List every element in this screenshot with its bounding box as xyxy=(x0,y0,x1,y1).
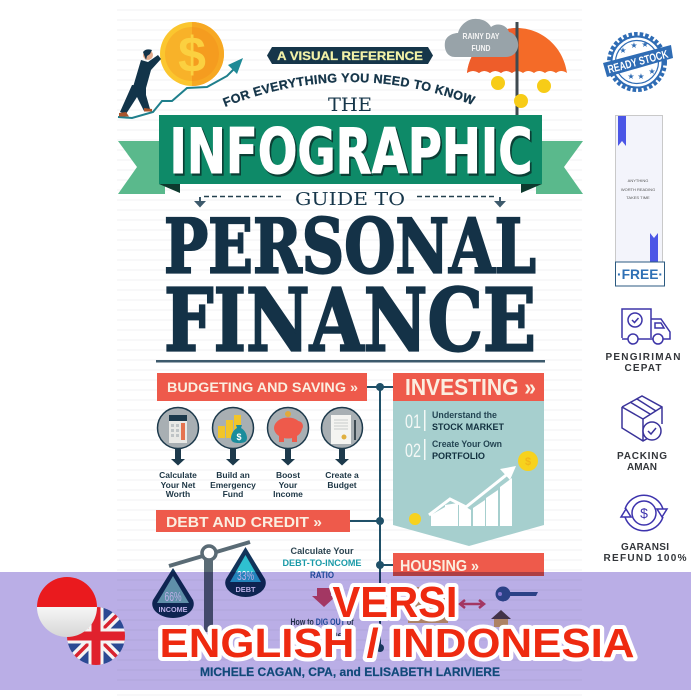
icon: umbrella with rainy day cloud and coins xyxy=(445,19,567,116)
panel: housing xyxy=(393,553,544,627)
icon: balance scale xyxy=(152,542,266,632)
badge: ready stock: ★ xyxy=(641,40,649,49)
step 01 xyxy=(405,410,504,433)
icon: gold dollar coin: $ xyxy=(178,27,206,83)
section header xyxy=(393,553,544,576)
step 02 xyxy=(405,439,502,462)
badge: ready stock: ★ xyxy=(648,67,656,76)
icon: rising arrow xyxy=(118,58,243,118)
icon: businessman xyxy=(119,49,161,117)
banner: green ribbon with infographic: INFOGRAPHIC xyxy=(170,115,532,188)
bookmark: free gift xyxy=(616,116,664,286)
section header: HOUSING » xyxy=(400,558,479,575)
umbrella xyxy=(467,22,567,116)
icon: dollar refund: $ xyxy=(640,505,648,521)
icon: package box xyxy=(622,396,662,441)
heading: finance: FINANCE xyxy=(164,270,536,372)
drop: 66% income xyxy=(152,568,194,618)
panel: investing xyxy=(393,373,544,546)
text: boost your income: Income xyxy=(273,489,303,499)
text: dig out of debt: Your Debt xyxy=(309,630,351,640)
text: build an emergency fund: Fund xyxy=(223,489,243,499)
text: pengiriman cepat: PENGIRIMAN xyxy=(606,352,680,363)
icon: large coin xyxy=(518,451,538,471)
badge: ready stock: ★ xyxy=(637,72,645,81)
bookmark: free gift: ANYTHING xyxy=(628,178,648,183)
text: build an emergency fund: Emergency xyxy=(210,480,256,490)
icon: key xyxy=(491,586,538,627)
label: free xyxy=(616,262,664,286)
step 01: Understand the xyxy=(432,410,497,420)
rainy day cloud: RAINY DAY xyxy=(462,31,500,41)
text: debt-to-income ratio: DEBT-TO-INCOME xyxy=(282,558,362,568)
text: calculate your net worth: Worth xyxy=(166,489,190,499)
rainy day cloud: FUND xyxy=(472,43,490,53)
text: packing aman: AMAN xyxy=(627,462,657,473)
banner: green ribbon with infographic: INFOGRAPHIC xyxy=(171,117,534,190)
heading: guide to with dashed arrows: GUIDE TO xyxy=(295,189,405,210)
title: versi: VERSI xyxy=(332,578,458,627)
icon: UK flag xyxy=(67,607,125,665)
text: dig out of debt xyxy=(290,617,354,640)
text: boost your income: Boost xyxy=(276,470,300,480)
text: debt-to-income ratio xyxy=(282,546,362,580)
text: debt-to-income ratio: RATIO xyxy=(310,570,334,580)
text: calculate your net worth: Calculate xyxy=(159,470,197,480)
section header: BUDGETING AND SAVING » xyxy=(167,380,358,395)
step 02: Create Your Own xyxy=(432,439,502,449)
timeline connector xyxy=(350,383,393,652)
heading: the: THE xyxy=(328,94,372,116)
text: debt-to-income ratio: Calculate Your xyxy=(290,546,354,556)
step 01: 01 xyxy=(405,412,421,433)
text: pengiriman cepat: CEPAT xyxy=(624,363,662,374)
falling coins xyxy=(491,76,551,108)
icon: house xyxy=(408,587,448,623)
text: boost your income: Your xyxy=(279,480,298,490)
heading: guide to with dashed arrows xyxy=(194,189,506,210)
down arrows xyxy=(171,448,349,466)
text: build an emergency fund: Build an xyxy=(216,470,250,480)
drop: 33% debt: 33% xyxy=(237,568,254,583)
icon: calculator xyxy=(158,408,198,448)
badge: ready stock: READY STOCK xyxy=(607,49,670,76)
section header xyxy=(157,373,367,401)
badge: ready stock: ★ xyxy=(619,46,627,55)
text: calculate your net worth: Your Net xyxy=(161,480,196,490)
icon: small coin xyxy=(409,513,421,525)
icon: dollar refund xyxy=(621,495,667,531)
step 01: STOCK MARKET xyxy=(432,422,504,433)
icon: Indonesian flag xyxy=(37,577,97,637)
author line: MICHELE CAGAN, CPA, and ELISABETH LARIVIERE xyxy=(200,665,500,679)
title: english / indonesia: ENGLISH / INDONESIA xyxy=(160,620,634,666)
badge: a visual reference xyxy=(267,47,433,64)
badge: ready stock: ★ xyxy=(627,72,635,81)
bookmark: free gift: WORTH READING xyxy=(621,187,655,192)
text: create a budget: Create a xyxy=(325,470,359,480)
section header: DEBT AND CREDIT » xyxy=(166,514,322,531)
icon: delivery truck xyxy=(622,309,670,344)
drop: 33% debt: DEBT xyxy=(236,587,256,594)
icon: coins and money bag: $ xyxy=(236,432,242,442)
icon: double arrow xyxy=(460,600,484,608)
text: dig out of debt: How to DIG OUT of xyxy=(290,617,354,627)
bookmark: free gift: TAKES TIME xyxy=(626,195,650,200)
icon: maroon down arrow xyxy=(312,588,336,607)
section header xyxy=(156,510,350,532)
drop: 66% income: INCOME xyxy=(158,607,188,614)
chart: rising white bars and arrow xyxy=(429,466,516,526)
icon: piggy bank xyxy=(268,408,308,448)
step 02: 02 xyxy=(405,441,421,462)
badge: a visual reference: A VISUAL REFERENCE xyxy=(277,51,423,63)
panel: debt and credit xyxy=(152,510,362,640)
rainy day cloud xyxy=(445,19,518,57)
text: garansi refund: GARANSI xyxy=(621,542,669,553)
icon: coins and money bag xyxy=(212,408,254,448)
badge: ready stock: ★ xyxy=(630,41,638,50)
text: garansi refund: REFUND 100% xyxy=(604,553,687,564)
panel: budgeting and saving xyxy=(157,373,367,499)
section header: INVESTING » xyxy=(405,374,536,400)
icon: large coin: $ xyxy=(525,456,531,468)
drop: 66% income: 66% xyxy=(164,589,182,604)
icon: man pushing coin up rising arrow xyxy=(118,22,243,118)
heading: personal: PERSONAL xyxy=(164,202,536,290)
icon: budget document xyxy=(322,408,362,448)
step 02: PORTFOLIO xyxy=(432,451,485,462)
label: free: ·FREE· xyxy=(617,266,663,282)
subtitle: curved text: FOR EVERYTHING YOU NEED TO KNOW xyxy=(222,73,476,107)
overlay: purple band xyxy=(0,572,691,690)
text: packing aman: PACKING xyxy=(617,451,667,462)
text: create a budget: Budget xyxy=(327,480,357,490)
drop: 33% debt xyxy=(225,547,266,597)
badge: ready stock xyxy=(603,34,673,90)
